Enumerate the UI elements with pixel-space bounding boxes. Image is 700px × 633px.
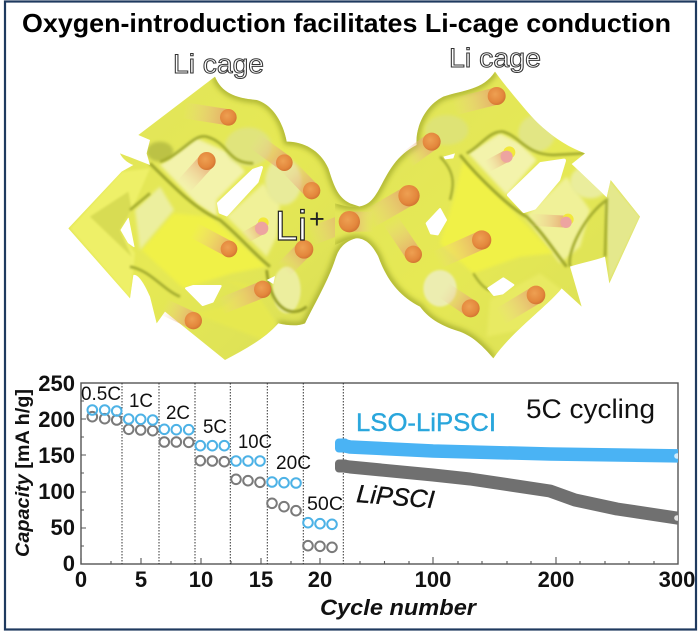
illustration: right Li cage [333, 67, 653, 367]
rate labels: 10C [238, 431, 272, 453]
y axis tick labels: 0 [63, 551, 75, 576]
label: Li+ [275, 202, 325, 249]
label: left Li cage: Li cage [173, 49, 264, 79]
spheres [503, 146, 515, 158]
x axis tick labels [75, 567, 695, 592]
y axis tick labels: 50 [51, 515, 75, 540]
rate labels: 50C [307, 493, 343, 515]
label: right Li cage: Li cage [449, 43, 541, 73]
tails [182, 102, 230, 125]
rate labels [81, 383, 343, 515]
y axis tick labels: 150 [38, 443, 75, 468]
x axis tick labels: 200 [538, 567, 574, 592]
rate labels: 0.5C [81, 383, 121, 405]
x axis tick labels: 0 [75, 567, 87, 592]
white holes [509, 161, 564, 211]
rate labels: 2C [166, 402, 190, 424]
x axis title: Cycle number [320, 595, 478, 620]
y axis tick labels [38, 371, 75, 576]
label: Li+: Li [275, 202, 307, 249]
rate labels: 1C [129, 390, 153, 412]
x axis tick labels: 20 [308, 567, 332, 592]
axis ticks [81, 401, 654, 564]
x axis tick labels: 15 [249, 567, 273, 592]
y axis tick labels: 200 [38, 407, 75, 432]
spheres [258, 217, 269, 228]
title: Oxygen-introduction facilitates Li-cage conduction [22, 8, 671, 38]
x axis tick labels: 10 [189, 567, 213, 592]
series: LSO-LiPSCI rate points [88, 405, 337, 529]
rate step dividers [122, 383, 343, 564]
rate labels: 20C [276, 452, 311, 474]
y axis tick labels: 100 [38, 479, 75, 504]
x axis tick labels: 5 [135, 567, 147, 592]
rate labels: 5C [203, 416, 227, 438]
series: LiPSCI cycling band [335, 460, 690, 521]
tails [451, 88, 499, 115]
label: Li+: + [309, 204, 325, 234]
annotation: 5C cycling: 5C cycling [526, 394, 655, 424]
series: LiPSCI rate points [88, 412, 337, 552]
y axis title: Capacity [mA h/g] [13, 389, 34, 557]
legend: LSO-LiPSCI: LSO-LiPSCI [356, 409, 496, 437]
illustration: left Li cage [68, 76, 360, 360]
y axis tick labels: 250 [38, 371, 75, 396]
chart: capacity vs cycle number [13, 371, 695, 620]
x axis tick labels: 100 [415, 567, 451, 592]
plot area [81, 383, 678, 564]
x axis tick labels: 300 [659, 567, 695, 592]
white holes [218, 167, 262, 215]
series: LSO-LiPSCI cycling band [335, 438, 690, 459]
legend: LiPSCI: LiPSCI [356, 480, 436, 514]
